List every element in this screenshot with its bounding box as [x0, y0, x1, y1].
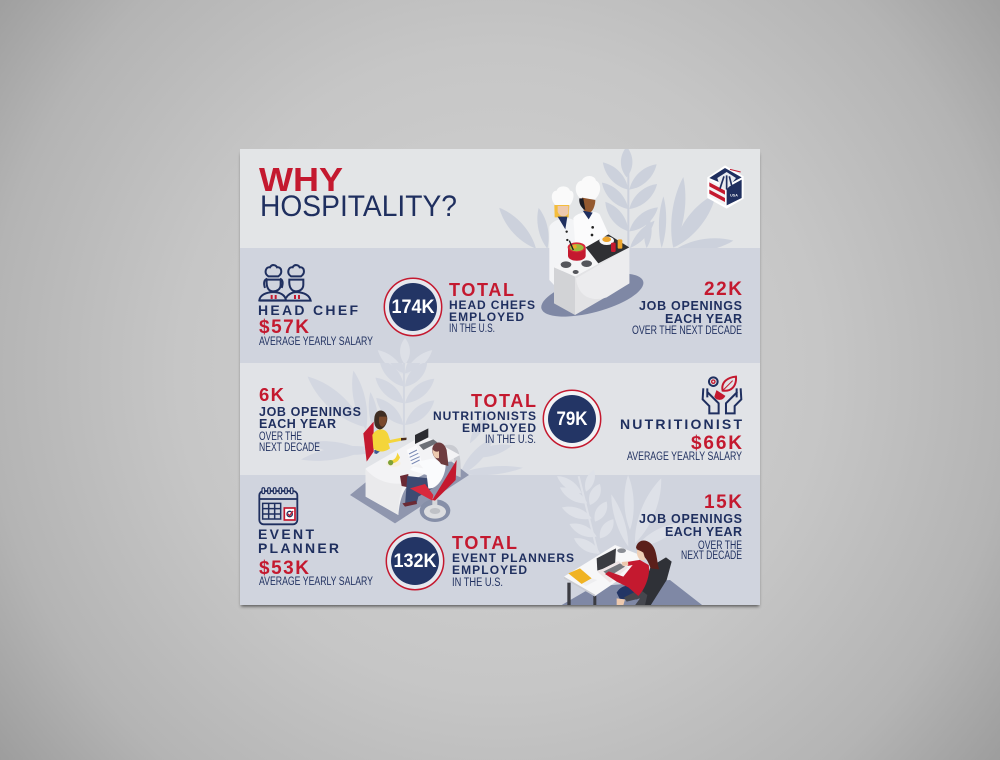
text: 15K job openings: OVER THE: [698, 540, 742, 552]
band: event planner: [240, 475, 760, 605]
band: nutritionist: [240, 363, 760, 475]
event planner column: PLANNER: [258, 540, 339, 556]
event planner column: [258, 488, 373, 588]
text: 15K job openings: JOB OPENINGS: [639, 512, 742, 526]
text: total nutritionists: EMPLOYED: [462, 421, 536, 435]
text: total head chefs: IN THE U.S.: [449, 323, 495, 335]
text: total nutritionists: IN THE U.S.: [485, 434, 536, 446]
icon: calendar: [259, 488, 297, 524]
stat circle: 132K: 132K: [394, 551, 437, 572]
stat circle: 132K: [386, 532, 444, 590]
stat circle: 174K: [384, 278, 442, 336]
illustration: event planner at laptop: [560, 540, 703, 606]
head chef column: [258, 265, 373, 348]
text: 22K job openings: 22K: [704, 279, 742, 300]
leaves: faint tips in chef band: [378, 338, 432, 363]
salary: 66K: $66K: [691, 433, 742, 454]
label: nutritionist: NUTRITIONIST: [620, 416, 742, 432]
icon: AIA logo cube: [707, 165, 744, 209]
text: total nutritionists: TOTAL: [471, 391, 536, 411]
caption: salary: AVERAGE YEARLY SALARY: [259, 576, 373, 588]
text: 15K job openings: NEXT DECADE: [681, 550, 742, 562]
text: 6K job openings: 6K: [259, 384, 285, 405]
text: 6K job openings: EACH YEAR: [259, 417, 336, 431]
text: total event planners: EVENT PLANNERS: [452, 551, 574, 565]
band: header: [240, 149, 760, 248]
label: head chef: HEAD CHEF: [258, 302, 358, 318]
text: total event planners: EMPLOYED: [452, 563, 527, 577]
stat circle: 174K: 174K: [392, 297, 435, 318]
poster shadow: [241, 154, 759, 606]
salary: 57K: $57K: [259, 317, 309, 338]
leaves: nutritionist plant: [300, 346, 523, 479]
poster panel: [240, 147, 760, 606]
salary: 53K: $53K: [259, 558, 309, 579]
illustration: nutritionist consultation desk: [350, 410, 469, 523]
text: total nutritionists: [433, 391, 536, 446]
nutritionist column: [620, 377, 742, 463]
band: head chef: [240, 248, 760, 363]
text: 15K job openings: EACH YEAR: [665, 525, 742, 539]
title: WHY: [259, 161, 343, 198]
text: 6K job openings: [259, 384, 361, 454]
caption: salary: AVERAGE YEARLY SALARY: [627, 451, 742, 463]
stat circle: 79K: 79K: [556, 409, 588, 430]
text: 6K job openings: JOB OPENINGS: [259, 405, 361, 419]
text: 22K job openings: EACH YEAR: [665, 312, 742, 326]
leaves: header plant: [494, 147, 734, 254]
illustration: chefs at kitchen counter: [541, 176, 644, 317]
title: HOSPITALITY?: [260, 190, 457, 223]
text: total event planners: TOTAL: [452, 533, 517, 553]
text: total head chefs: [449, 280, 535, 335]
label: event planner: EVENT: [258, 526, 314, 542]
text: total event planners: IN THE U.S.: [452, 577, 503, 589]
text: 6K job openings: OVER THE: [259, 431, 302, 443]
text: 22K job openings: OVER THE NEXT DECADE: [632, 325, 742, 337]
text: total head chefs: EMPLOYED: [449, 310, 524, 324]
title: [259, 161, 457, 223]
text: total nutritionists: NUTRITIONISTS: [433, 409, 536, 423]
chef buttons: [271, 295, 300, 299]
icon: hands with food: [703, 377, 741, 413]
text: 15K job openings: [639, 492, 742, 562]
text: 22K job openings: JOB OPENINGS: [639, 299, 742, 313]
text: 22K job openings: [632, 279, 742, 337]
text: 6K job openings: NEXT DECADE: [259, 442, 320, 454]
text: total head chefs: TOTAL: [449, 280, 514, 300]
icon: two chefs: [259, 265, 311, 301]
text: 15K job openings: 15K: [704, 492, 742, 513]
text: total head chefs: HEAD CHEFS: [449, 298, 535, 312]
text: total event planners: [452, 533, 574, 589]
leaves: event planner plant: [558, 475, 680, 554]
stat circle: 79K: [543, 390, 601, 448]
icon: AIA logo cube: USA: [730, 193, 738, 197]
caption: salary: AVERAGE YEARLY SALARY: [259, 336, 373, 348]
